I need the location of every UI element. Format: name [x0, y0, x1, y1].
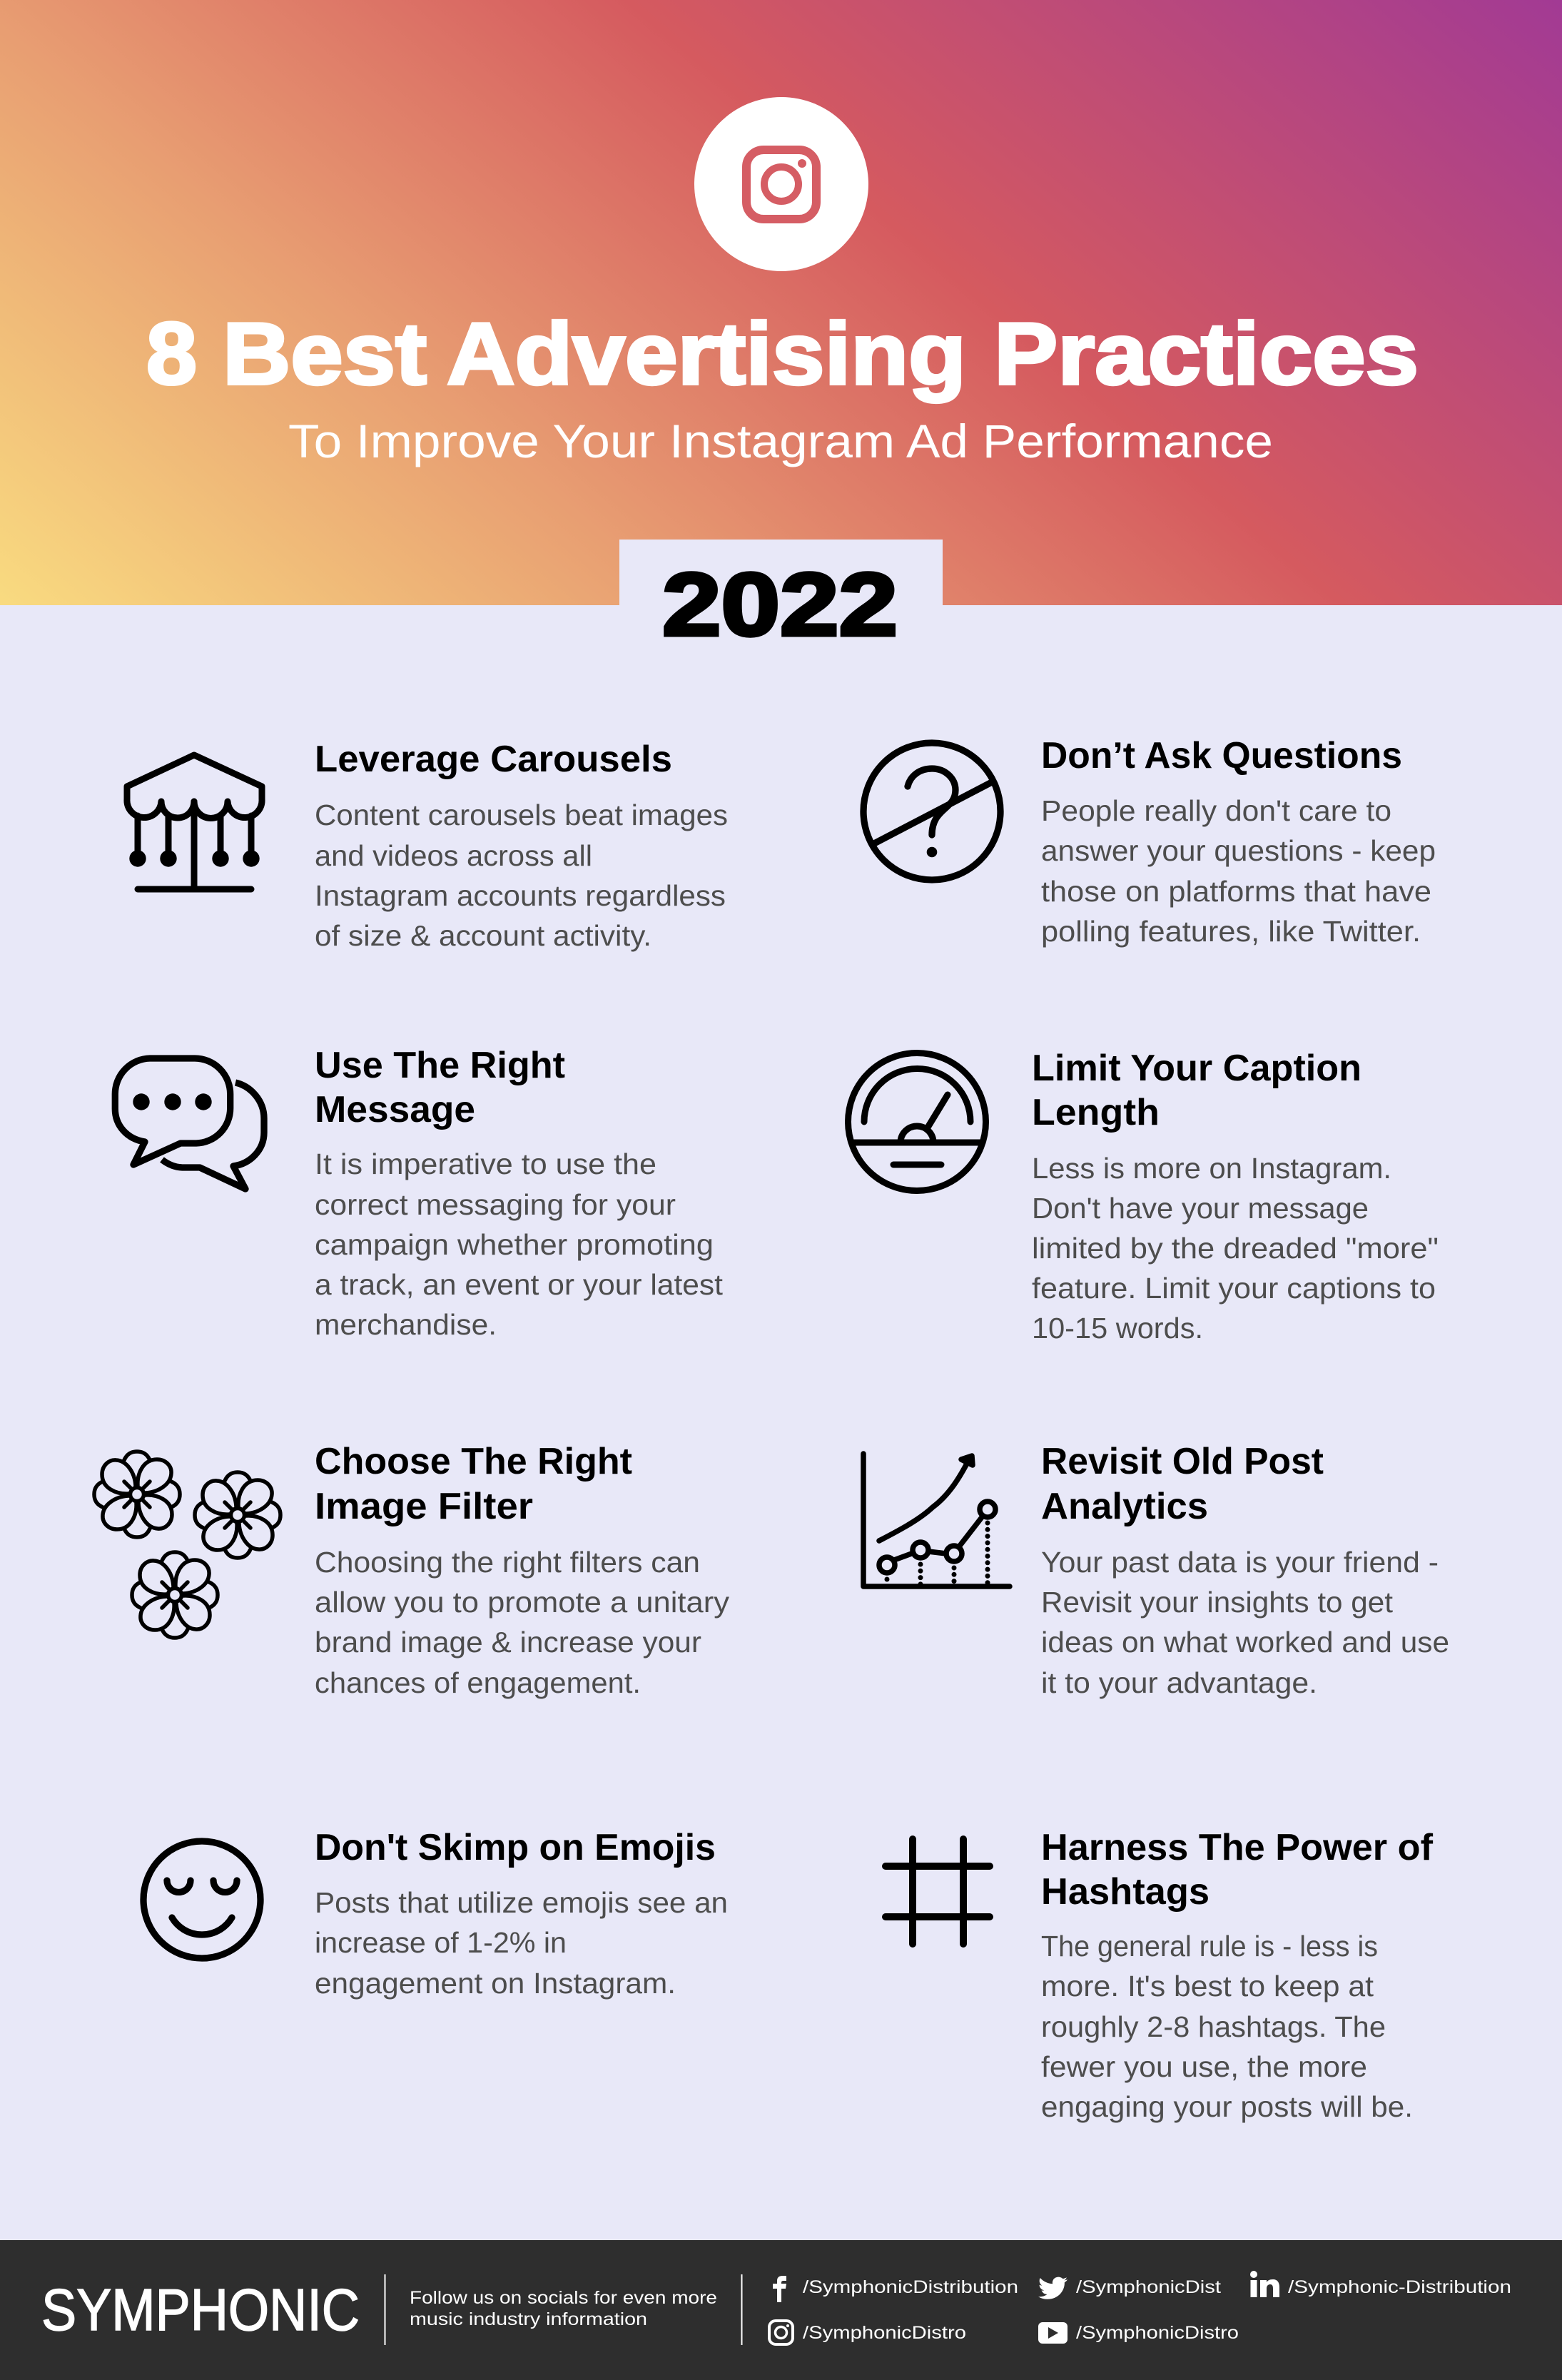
- title: [146, 305, 1419, 403]
- heading: Use The Right: [315, 1045, 565, 1086]
- twitter handle: /SymphonicDist: [1076, 2277, 1221, 2297]
- title: Best: [223, 305, 427, 403]
- body text: Choosing the right filters can: [315, 1546, 700, 1579]
- panel: revisit old post analytics: [863, 1441, 1449, 1699]
- icon: line chart: [863, 1454, 1010, 1586]
- body text: of size & account activity.: [315, 919, 651, 952]
- body text: allow you to promote a unitary: [315, 1586, 730, 1619]
- panel: choose the right image filter: [94, 1441, 730, 1699]
- heading: [1032, 1048, 1361, 1133]
- heading: Don't Skimp on Emojis: [315, 1827, 716, 1868]
- heading: Image Filter: [315, 1486, 533, 1527]
- heading: Revisit Old Post: [1041, 1441, 1324, 1482]
- header banner: [0, 0, 1562, 605]
- year tab: [619, 540, 943, 654]
- icon: gauge: [848, 1053, 986, 1190]
- icon: carousel: [127, 755, 262, 889]
- body text: The general rule is - less is: [1041, 1930, 1378, 1963]
- heading: Leverage Carousels: [315, 739, 672, 780]
- body text: more. It's best to keep at: [1041, 1970, 1374, 2002]
- body text: brand image & increase your: [315, 1626, 701, 1659]
- icon: instagram badge: [694, 97, 868, 271]
- title: 8: [146, 305, 197, 403]
- follow text: Follow us on socials for even more: [410, 2288, 717, 2308]
- follow text: music industry information: [410, 2309, 647, 2329]
- panel: limit your caption length: [848, 1048, 1439, 1345]
- heading: Hashtags: [1041, 1871, 1209, 1913]
- icon: crossed question mark: [863, 743, 1000, 880]
- body text: [315, 1546, 730, 1699]
- heading: Analytics: [1041, 1486, 1208, 1527]
- panel: don't skimp on emojis: [143, 1827, 728, 2000]
- body text: ideas on what worked and use: [1041, 1626, 1449, 1659]
- body text: [315, 1148, 723, 1341]
- logo: symphonic wordmark: SYMPHONIC: [41, 2277, 360, 2343]
- icon: smiley: [143, 1841, 260, 1958]
- body text: Your past data is your friend -: [1041, 1546, 1439, 1579]
- body text: it to your advantage.: [1041, 1666, 1317, 1699]
- body text: engagement on Instagram.: [315, 1967, 676, 2000]
- panel: use the right message: [115, 1045, 723, 1341]
- title: Advertising: [447, 305, 966, 403]
- body text: roughly 2-8 hashtags. The: [1041, 2010, 1386, 2043]
- title: Practices: [994, 305, 1419, 403]
- heading: [315, 1045, 565, 1130]
- follow text: [410, 2288, 717, 2329]
- icon: twitter: [1038, 2277, 1067, 2299]
- icon: hashtag: [886, 1839, 990, 1944]
- heading: [1041, 1827, 1434, 1913]
- body text: and videos across all: [315, 839, 592, 872]
- body text: feature. Limit your captions to: [1032, 1272, 1436, 1305]
- instagram handle: /SymphonicDistro: [803, 2323, 966, 2343]
- panel: leverage carousels: [127, 739, 728, 952]
- body text: engaging your posts will be.: [1041, 2090, 1413, 2123]
- body text: [1041, 794, 1436, 948]
- body text: [315, 799, 728, 952]
- body text: 10-15 words.: [1032, 1312, 1203, 1345]
- heading: Choose The Right: [315, 1441, 632, 1482]
- body text: those on platforms that have: [1041, 875, 1431, 908]
- icon: chat bubbles: [115, 1058, 264, 1189]
- footer bar: [0, 2240, 1562, 2380]
- icon: linkedin: [1250, 2271, 1279, 2297]
- icon: flowers: [94, 1452, 280, 1638]
- icon: instagram: [769, 2321, 793, 2344]
- body text: [1041, 1930, 1413, 2123]
- body text: correct messaging for your: [315, 1188, 676, 1221]
- linkedin handle: /Symphonic-Distribution: [1288, 2277, 1511, 2297]
- body text: Don't have your message: [1032, 1192, 1369, 1225]
- body text: Less is more on Instagram.: [1032, 1152, 1391, 1185]
- body text: fewer you use, the more: [1041, 2050, 1367, 2083]
- body text: Posts that utilize emojis see an: [315, 1886, 728, 1919]
- body text: answer your questions - keep: [1041, 834, 1436, 867]
- heading: Harness The Power of: [1041, 1827, 1434, 1868]
- body text: a track, an event or your latest: [315, 1268, 723, 1301]
- body text: [1041, 1546, 1449, 1699]
- icon: youtube: [1038, 2322, 1067, 2344]
- body text: polling features, like Twitter.: [1041, 915, 1421, 948]
- body text: increase of 1-2% in: [315, 1926, 567, 1959]
- body text: [1032, 1152, 1439, 1345]
- heading: [315, 1441, 632, 1527]
- body text: merchandise.: [315, 1308, 497, 1341]
- body text: It is imperative to use the: [315, 1148, 656, 1180]
- body text: Revisit your insights to get: [1041, 1586, 1393, 1619]
- youtube handle: /SymphonicDistro: [1076, 2323, 1239, 2343]
- year tab: 2022: [662, 555, 898, 654]
- icon: facebook: [773, 2276, 786, 2302]
- heading: Limit Your Caption: [1032, 1048, 1361, 1089]
- panel: don't ask questions: [863, 735, 1436, 948]
- body text: [315, 1886, 728, 2000]
- body text: limited by the dreaded "more": [1032, 1232, 1439, 1265]
- subtitle: To Improve Your Instagram Ad Performance: [288, 415, 1273, 467]
- heading: Don’t Ask Questions: [1041, 735, 1402, 776]
- body text: People really don't care to: [1041, 794, 1391, 827]
- heading: Message: [315, 1089, 475, 1130]
- panel: harness the power of hashtags: [886, 1827, 1434, 2123]
- facebook handle: /SymphonicDistribution: [803, 2277, 1018, 2297]
- body text: Instagram accounts regardless: [315, 879, 726, 912]
- heading: Length: [1032, 1092, 1160, 1133]
- heading: [1041, 1441, 1324, 1527]
- body text: chances of engagement.: [315, 1666, 641, 1699]
- body text: Content carousels beat images: [315, 799, 728, 831]
- body text: campaign whether promoting: [315, 1228, 714, 1261]
